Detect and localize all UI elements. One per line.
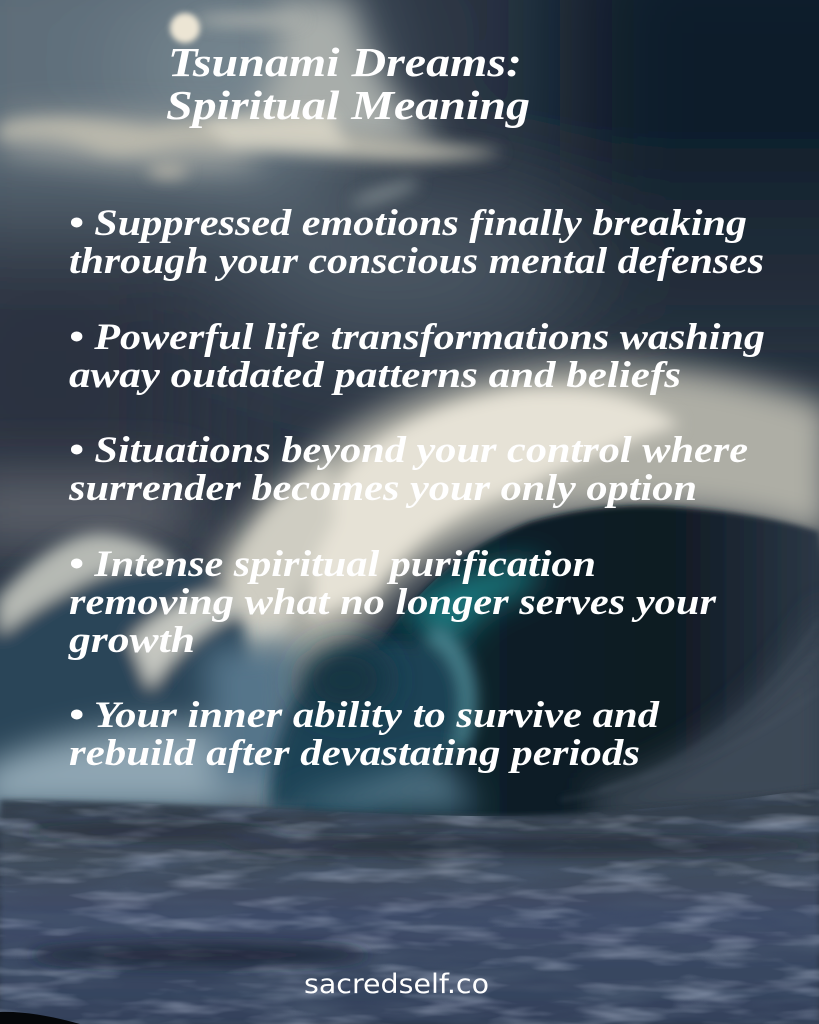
bullet: survive and rebuild: • Your inner ability to survive and: [69, 695, 660, 736]
bullet: spiritual purification: • Intense spiritual purification: [69, 544, 596, 585]
bullet: spiritual purification: growth: [68, 620, 195, 661]
sea surface: [0, 780, 819, 1024]
bullet: life transformations: away outdated patterns and beliefs: [69, 355, 681, 396]
bullet: survive and rebuild: rebuild after devastating periods: [69, 733, 640, 774]
bullet: survive and rebuild: [69, 695, 660, 774]
bullet: life transformations: • Powerful life transformations washing: [69, 317, 765, 358]
wave: crest and spray: [0, 362, 819, 810]
bullet: beyond control: surrender becomes your only option: [68, 468, 697, 509]
bullet: life transformations: [69, 317, 765, 396]
title: Tsunami Dreams:: [168, 39, 522, 85]
bullet: suppressed emotions: • Suppressed emotions finally breaking: [69, 203, 747, 244]
title: Spiritual Meaning: [166, 82, 530, 128]
bullet: beyond control: • Situations beyond your control where: [69, 430, 748, 471]
bullet: spiritual purification: [68, 544, 717, 661]
bullet: suppressed emotions: [69, 203, 764, 282]
bullet: suppressed emotions: through your conscious mental defenses: [69, 241, 764, 282]
title: [166, 39, 530, 128]
left foam wave: [0, 532, 249, 810]
wave: dark barrel body: [300, 506, 819, 820]
wave: curl and barrel interior: [270, 625, 480, 810]
clouds: [0, 0, 440, 169]
footer: website: sacredself.co: [304, 969, 489, 1000]
bullet: beyond control: [68, 430, 748, 509]
bullet: spiritual purification: removing what no longer serves your: [69, 582, 717, 623]
icon: pale sun: [170, 13, 200, 43]
